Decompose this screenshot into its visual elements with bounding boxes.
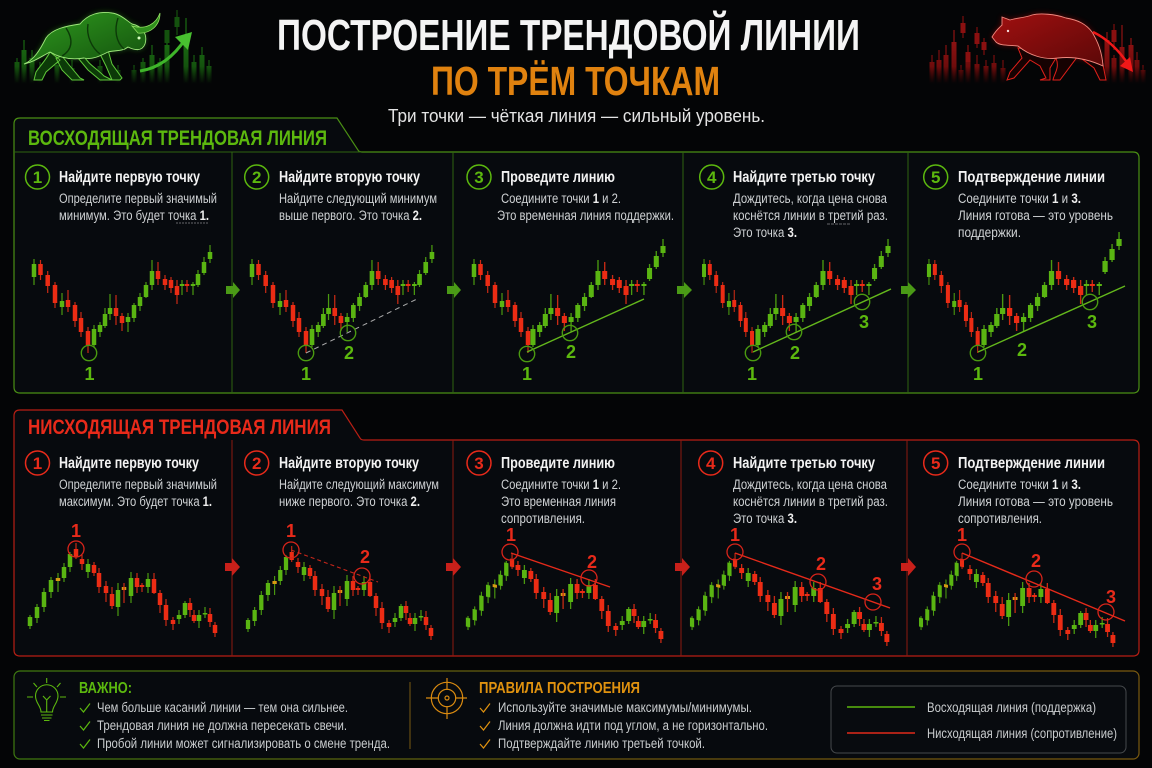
description: минимум. Это будет точка 1. (59, 208, 209, 223)
description: сопротивления. (501, 511, 585, 526)
step 3 down: Проведите линию (501, 455, 615, 472)
candlestick chart (921, 525, 1125, 647)
candlestick chart: 2 (1031, 551, 1041, 571)
candlestick chart: 1 (84, 364, 95, 384)
step 5 down: 5 (931, 454, 940, 473)
candlestick chart: 3 (872, 574, 882, 594)
arrow (226, 282, 240, 298)
description: Соедините точки 1 и 2. (501, 477, 621, 492)
step 3 down: 3 (474, 454, 484, 473)
candlestick chart: 2 (360, 547, 370, 567)
illustration: green bull with up arrow (17, 10, 209, 84)
icon: target (426, 678, 467, 719)
description: Соедините точки 1 и 2. (501, 191, 621, 206)
illustration: red bear with down arrow (932, 14, 1143, 84)
arrow (901, 558, 916, 576)
step 4 up (700, 165, 891, 384)
description: сопротивления. (958, 511, 1042, 526)
rules list: Линия должна идти под углом, а не горизонтально. (498, 718, 768, 733)
candlestick chart: 1 (730, 525, 740, 545)
candlestick chart: 2 (566, 342, 576, 362)
step 1 down: Найдите первую точку (59, 455, 199, 472)
step 5 up (924, 165, 1125, 384)
legend: Нисходящая линия (сопротивление) (927, 726, 1117, 741)
description (733, 191, 888, 240)
candlestick chart: 1 (301, 364, 311, 384)
description: Это точка 3. (733, 511, 797, 526)
candlestick chart: 3 (1087, 312, 1097, 332)
rules list: Подтверждайте линию третьей точкой. (498, 736, 705, 751)
description: Это временная линия поддержки. (497, 208, 674, 223)
candlestick chart: 1 (522, 364, 532, 384)
step 5 down: Подтверждение линии (958, 455, 1105, 472)
step 1 up: 1 (33, 168, 42, 187)
panel heading: ВОСХОДЯЩАЯ ТРЕНДОВАЯ ЛИНИЯ (28, 127, 327, 150)
important list: Трендовая линия не должна пересекать свечи. (97, 718, 347, 733)
candlestick chart: 1 (747, 364, 757, 384)
description: Это временная линия (501, 494, 616, 509)
step 4 down: Найдите третью точку (733, 455, 875, 472)
tagline: Три точки — чёткая линия — сильный уровень. (388, 105, 765, 126)
step 4 down (692, 451, 890, 646)
arrow (675, 558, 690, 576)
candlestick chart: 1 (957, 525, 967, 545)
important list (80, 700, 390, 751)
description (279, 191, 437, 223)
description: Найдите следующий минимум (279, 191, 437, 206)
description: Соедините точки 1 и 3. (958, 477, 1081, 492)
subtitle heading: ПО ТРЁМ ТОЧКАМ (431, 58, 720, 104)
step 1 down (26, 451, 217, 637)
description (59, 477, 217, 509)
candlestick chart (252, 245, 432, 384)
step 2 down: 2 (252, 454, 261, 473)
step 2 up (245, 165, 437, 384)
description: выше первого. Это точка 2. (279, 208, 422, 223)
rules list (480, 700, 768, 751)
description (59, 191, 217, 223)
arrow (225, 558, 240, 576)
description: поддержки. (958, 225, 1021, 240)
candlestick chart: 1 (286, 521, 296, 541)
arrow (677, 282, 692, 298)
description (958, 477, 1113, 526)
step 3 up (467, 165, 674, 384)
candlestick chart (468, 525, 661, 643)
candlestick chart: 2 (587, 552, 597, 572)
step 4 up: 4 (707, 168, 717, 187)
description: Соедините точки 1 и 3. (958, 191, 1081, 206)
candlestick chart (929, 232, 1125, 384)
description: коснётся линии в третий раз. (733, 208, 888, 223)
candlestick chart: 1 (71, 521, 81, 541)
important list: Пробой линии может сигнализировать о смене тренда. (97, 736, 390, 751)
step 4 down: 4 (706, 454, 716, 473)
step 3 up: Проведите линию (501, 169, 615, 186)
legend (831, 686, 1126, 753)
step 1 up (26, 165, 217, 384)
rules list: Используйте значимые максимумы/минимумы. (498, 700, 752, 715)
description: Найдите следующий максимум (279, 477, 439, 492)
step 1 up: Найдите первую точку (59, 169, 200, 186)
step 1 down: 1 (33, 454, 42, 473)
description (501, 477, 621, 526)
candlestick chart: 2 (790, 343, 800, 363)
candlestick chart (692, 525, 890, 646)
panel: notes and legend (14, 671, 1139, 759)
step 5 up: Подтверждение линии (958, 169, 1105, 186)
description (279, 477, 439, 509)
title: ПОСТРОЕНИЕ ТРЕНДОВОЙ ЛИНИИ (277, 9, 860, 60)
description: Линия готова — это уровень (958, 208, 1113, 223)
step 2 up: Найдите вторую точку (279, 169, 420, 186)
step 3 down (467, 451, 661, 643)
arrow (446, 558, 461, 576)
candlestick chart: 1 (506, 525, 516, 545)
important heading: ВАЖНО: (79, 680, 132, 697)
step 4 up: Найдите третью точку (733, 169, 875, 186)
rules heading: ПРАВИЛА ПОСТРОЕНИЯ (479, 680, 640, 697)
panel heading: НИСХОДЯЩАЯ ТРЕНДОВАЯ ЛИНИЯ (28, 416, 331, 439)
panel: ascending trend line (14, 118, 1139, 393)
panel: descending trend line (14, 410, 1139, 656)
candlestick chart: 2 (816, 554, 826, 574)
description: Линия готова — это уровень (958, 494, 1113, 509)
icon: light bulb (27, 678, 66, 720)
description: Определите первый значимый (59, 477, 217, 492)
step 2 down: Найдите вторую точку (279, 455, 419, 472)
description: максимум. Это будет точка 1. (59, 494, 212, 509)
step 2 down (245, 451, 439, 640)
candlestick chart: 2 (344, 343, 354, 363)
candlestick chart: 3 (859, 312, 869, 332)
description: Это точка 3. (733, 225, 797, 240)
description (497, 191, 674, 223)
arrow (447, 282, 461, 298)
candlestick chart (704, 239, 891, 384)
description: ниже первого. Это точка 2. (279, 494, 420, 509)
candlestick chart (248, 521, 431, 640)
step 3 up: 3 (474, 168, 484, 187)
candlestick chart: 3 (1106, 587, 1116, 607)
legend: Восходящая линия (поддержка) (927, 700, 1096, 715)
description (733, 477, 888, 526)
description: Определите первый значимый (59, 191, 217, 206)
candlestick chart (30, 521, 215, 637)
description: Дождитесь, когда цена снова (733, 191, 887, 206)
description: Дождитесь, когда цена снова (733, 477, 887, 492)
important list: Чем больше касаний линии — тем она сильнее. (97, 700, 348, 715)
step 5 up: 5 (931, 168, 940, 187)
candlestick chart: 2 (1017, 340, 1027, 360)
description (958, 191, 1113, 240)
candlestick chart (34, 245, 210, 384)
description: коснётся линии в третий раз. (733, 494, 888, 509)
candlestick chart (474, 239, 663, 384)
candlestick chart: 1 (973, 364, 983, 384)
arrow (901, 282, 916, 298)
step 2 up: 2 (252, 168, 261, 187)
step 5 down (921, 451, 1125, 647)
